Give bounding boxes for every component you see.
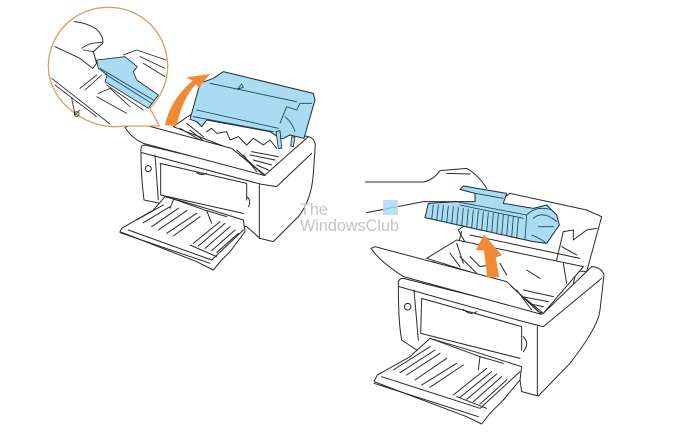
printer 1: opening the cover bbox=[120, 72, 315, 270]
orange curved arrow bbox=[165, 74, 210, 126]
interior bbox=[427, 240, 583, 313]
open top cover interior bbox=[173, 115, 308, 175]
printer body bbox=[141, 137, 315, 242]
open lid bbox=[458, 193, 602, 272]
front flap bbox=[371, 247, 542, 314]
lid hinge arms bbox=[276, 131, 295, 148]
watermark: WindowsClub bbox=[300, 217, 399, 235]
orange up arrow bbox=[476, 235, 502, 277]
hand bbox=[55, 22, 103, 68]
circle outline with pointer bbox=[48, 7, 168, 127]
paper tray bbox=[374, 338, 522, 424]
blue lid bbox=[190, 72, 315, 138]
paper tray bbox=[120, 197, 245, 270]
front flap bbox=[125, 123, 265, 176]
printer 2: lifting out the toner cartridge bbox=[365, 168, 604, 424]
magnified detail circle bbox=[48, 7, 168, 127]
watermark text: The bbox=[300, 201, 328, 219]
hands bbox=[365, 168, 487, 213]
blue tab bbox=[97, 57, 158, 108]
printer body bbox=[398, 267, 604, 396]
toner cartridge bbox=[425, 186, 559, 243]
watermark bbox=[300, 200, 399, 235]
watermark square bbox=[383, 200, 398, 215]
printer detail lines bbox=[52, 50, 166, 124]
